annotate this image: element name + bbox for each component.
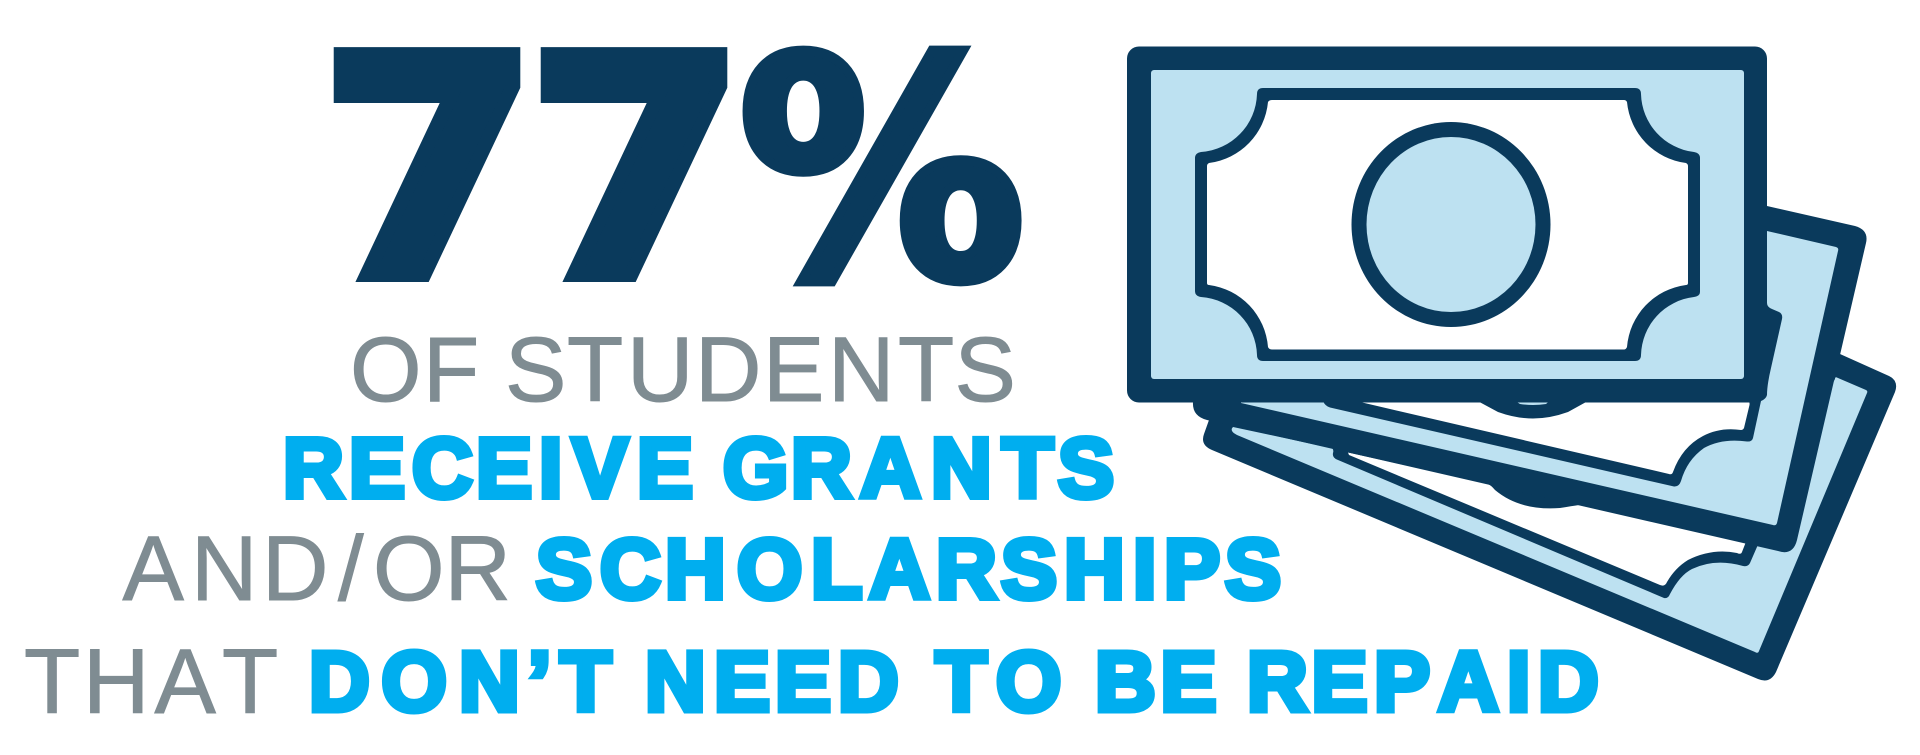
text line: that don't need to be repaid: BE [1095,634,1217,728]
icon: stack of three banknotes [1127,46,1896,680]
text line: and/or scholarships: AND/OR [122,518,511,620]
back banknote [1203,354,1896,680]
text line: receive grants: RECEIVE [283,421,693,515]
text line: that don't need to be repaid: TO [936,634,1061,728]
text line: receive grants: GRANTS [723,421,1114,515]
front banknote [1127,46,1767,402]
text line: that don't need to be repaid [24,631,1599,733]
text line: and/or scholarships: SCHOLARSHIPS [536,522,1281,616]
text line: that don't need to be repaid: REPAID [1247,634,1599,728]
text line: that don't need to be repaid: DON’T [309,634,611,728]
banknote inner frame [1195,88,1700,361]
text line: and/or scholarships [122,518,1281,620]
text line: of students: STUDENTS [505,319,1016,421]
middle banknote [1193,200,1867,552]
text line: of students: OF [350,319,479,421]
banknote centre medallion [1352,122,1550,327]
headline statistic: 77%: 7 [320,0,538,347]
text line: that don't need to be repaid: THAT [24,631,278,733]
headline statistic: 77%: % [738,0,1026,349]
text line: that don't need to be repaid: NEED [645,634,899,728]
headline statistic: 77%: 7 [527,0,745,347]
text line: receive grants [283,421,1114,515]
headline statistic: 77% [320,0,1026,349]
